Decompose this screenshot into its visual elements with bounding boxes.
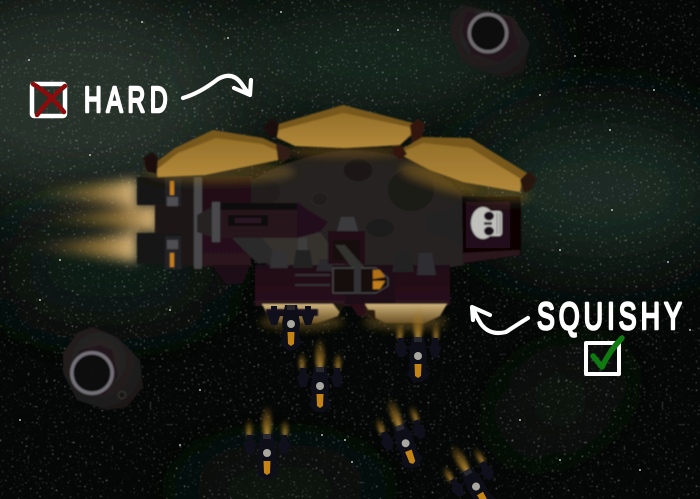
text: HARD: HARD xyxy=(84,79,172,120)
underside glow plates xyxy=(260,304,447,330)
label: squishy xyxy=(472,294,686,374)
label: hard xyxy=(32,76,251,120)
engine connectors xyxy=(165,177,196,269)
shield pod: centre xyxy=(264,105,425,148)
under-hull maroon section xyxy=(255,265,450,316)
docked fighter on hull xyxy=(295,267,388,293)
side cannon xyxy=(197,202,328,242)
asteroid: top right xyxy=(450,5,530,78)
engine blocks xyxy=(137,177,187,264)
icon: crossed checkbox xyxy=(32,84,65,116)
arrow: to squishy underside xyxy=(472,307,528,333)
fighter squadron xyxy=(244,305,509,499)
icon: skull xyxy=(471,207,502,239)
fighter 2 xyxy=(297,337,343,412)
mothership xyxy=(137,105,537,330)
fighter 3 xyxy=(395,307,441,382)
asteroid hull xyxy=(232,146,480,275)
fighter 6 xyxy=(432,433,509,499)
rear skull module xyxy=(425,196,521,264)
engine flames xyxy=(25,179,158,262)
fighter 1 xyxy=(266,305,318,350)
arrow: to hard hull xyxy=(183,76,251,98)
aft maroon body xyxy=(181,177,251,285)
central box xyxy=(328,231,365,268)
fighter 5 xyxy=(367,389,436,476)
shield pod: left xyxy=(143,130,295,184)
fighter 4 xyxy=(244,404,290,479)
asteroid: bottom left xyxy=(63,327,143,410)
text: SQUISHY: SQUISHY xyxy=(537,294,686,337)
icon: ticked checkbox xyxy=(586,338,622,374)
shield pod: right xyxy=(392,137,537,210)
armour spikes xyxy=(232,217,436,275)
